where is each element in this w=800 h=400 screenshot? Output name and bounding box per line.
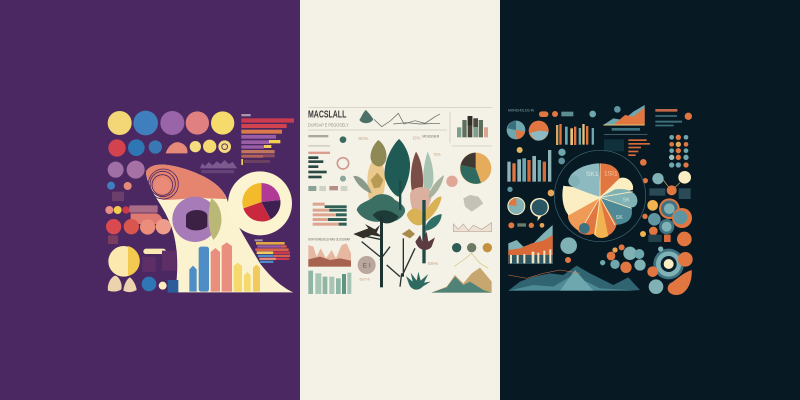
pie labels: 1SI1	[604, 171, 618, 178]
stat callouts: MOUSSER	[422, 134, 440, 138]
frame rules	[308, 107, 492, 146]
tan leaf	[367, 157, 385, 200]
area chart top	[603, 105, 645, 131]
two small pies	[507, 121, 549, 141]
cone icons	[108, 276, 137, 292]
fern right	[428, 175, 444, 198]
right ring cluster	[640, 198, 692, 237]
column chart top	[556, 124, 594, 145]
jagged line chart	[453, 223, 492, 232]
dark palm left	[353, 224, 383, 238]
stat callouts: 15%	[412, 135, 421, 141]
dark text blocks	[142, 251, 177, 272]
bare branches	[355, 234, 415, 287]
stat callouts: 59%	[428, 261, 439, 267]
panel: purple infographic	[105, 111, 294, 293]
horizontal bars centre right	[604, 134, 650, 156]
bottom mountain chart	[508, 266, 640, 291]
teal canopy	[357, 194, 405, 222]
top pills row	[539, 111, 596, 117]
cream donut with pie chart	[228, 171, 292, 235]
olive lens	[209, 198, 221, 240]
small pie and speech bubble	[507, 197, 549, 221]
yellow line chart	[454, 253, 488, 268]
cream pill	[143, 249, 166, 254]
pink pills on left	[105, 205, 164, 224]
pie labels	[586, 171, 630, 221]
panel: dark navy background	[500, 0, 800, 400]
green column chart	[308, 271, 351, 294]
small legend dots	[107, 182, 132, 201]
pie labels: SK	[616, 215, 623, 221]
half cream half yellow circle	[108, 246, 140, 277]
terracotta area chart	[308, 243, 351, 267]
top row of circles	[108, 111, 234, 135]
tall teal leaf	[385, 139, 410, 197]
row of shaded spheres	[106, 219, 171, 244]
bar chart on cream wave	[189, 242, 260, 292]
fern left	[353, 176, 372, 193]
sunburst cluster bottom right	[647, 246, 693, 295]
tan flower	[402, 229, 415, 238]
spiral centre	[154, 178, 170, 194]
line chart top	[374, 113, 440, 127]
dark rolled icon	[186, 210, 207, 230]
mid teal circle	[560, 237, 577, 254]
title: MACSLALL	[308, 110, 346, 121]
three status circles	[452, 243, 492, 252]
medallion	[358, 256, 376, 274]
small gauge icons	[337, 136, 349, 182]
second row of badges	[108, 139, 231, 157]
lilac badges	[108, 161, 145, 179]
brown leaf	[411, 152, 423, 200]
pink badge	[446, 176, 458, 187]
lilac circle with image	[172, 197, 218, 242]
panel: dark infographic	[507, 105, 693, 295]
small cream sphere	[159, 282, 167, 290]
column chart top right	[457, 116, 488, 137]
tree trunks	[380, 180, 426, 287]
right caption bars	[648, 235, 671, 242]
stacked horizontal bars	[313, 203, 347, 226]
pie labels: SK1	[586, 171, 599, 178]
horizontal bar chart top right	[241, 114, 294, 165]
dot matrix	[669, 135, 689, 168]
stat callouts: 60%	[359, 276, 371, 281]
yellow foliage	[407, 197, 442, 225]
pie overlay bubbles	[568, 175, 590, 234]
blue note block	[168, 280, 178, 293]
agave bottom	[406, 272, 431, 290]
pie labels: SK	[623, 198, 630, 204]
fern icon	[359, 110, 373, 123]
right heading and pills	[655, 109, 692, 126]
pink ribbon and cream wave	[146, 165, 293, 292]
panel: cream background	[300, 0, 500, 400]
bottom centre flower cluster	[600, 244, 646, 273]
pale green leaf	[423, 152, 433, 190]
striped leaf	[371, 140, 386, 166]
panel: botanical infographic	[308, 107, 492, 294]
pills row	[508, 222, 544, 228]
small area chart	[200, 160, 237, 168]
right top bubbles	[649, 171, 691, 199]
pink lower leaf	[410, 187, 432, 217]
spiral circle icon	[148, 169, 178, 199]
pink ribbon top	[146, 165, 227, 200]
donut pie right	[460, 153, 491, 184]
ring around main pie	[554, 150, 646, 242]
blue sphere	[142, 277, 156, 291]
section heading: NOR WOREGELD WAS OLOGONAR	[308, 238, 350, 242]
mountain chart	[431, 268, 492, 293]
panel: purple background	[0, 0, 300, 400]
subtitle: DURSAP E PEGOSELY	[308, 122, 349, 128]
small caption dots	[507, 147, 648, 196]
stat callouts	[358, 134, 441, 281]
left column chart	[507, 150, 551, 182]
left text and bars	[308, 135, 330, 178]
heading: MOREHOLDS IN	[508, 109, 534, 113]
tan leaf foliage patch	[371, 173, 383, 188]
pie wedge outlines	[563, 163, 633, 235]
caption blocks under area chart	[201, 170, 234, 173]
map dots	[463, 195, 483, 212]
stat callouts: 60%	[358, 136, 369, 142]
stat callouts: 75%	[433, 152, 441, 158]
green side leaf	[425, 214, 442, 231]
tiny orange pill	[565, 257, 571, 263]
small stats row	[308, 186, 347, 191]
medallion: E I	[363, 262, 371, 269]
pie chart	[242, 183, 280, 222]
dark tree crown	[373, 210, 399, 223]
main pie chart	[562, 163, 637, 238]
maroon agave	[415, 232, 435, 250]
layered area chart	[508, 225, 553, 264]
right orange circle	[677, 232, 692, 246]
stacked bars lower right	[255, 239, 290, 263]
